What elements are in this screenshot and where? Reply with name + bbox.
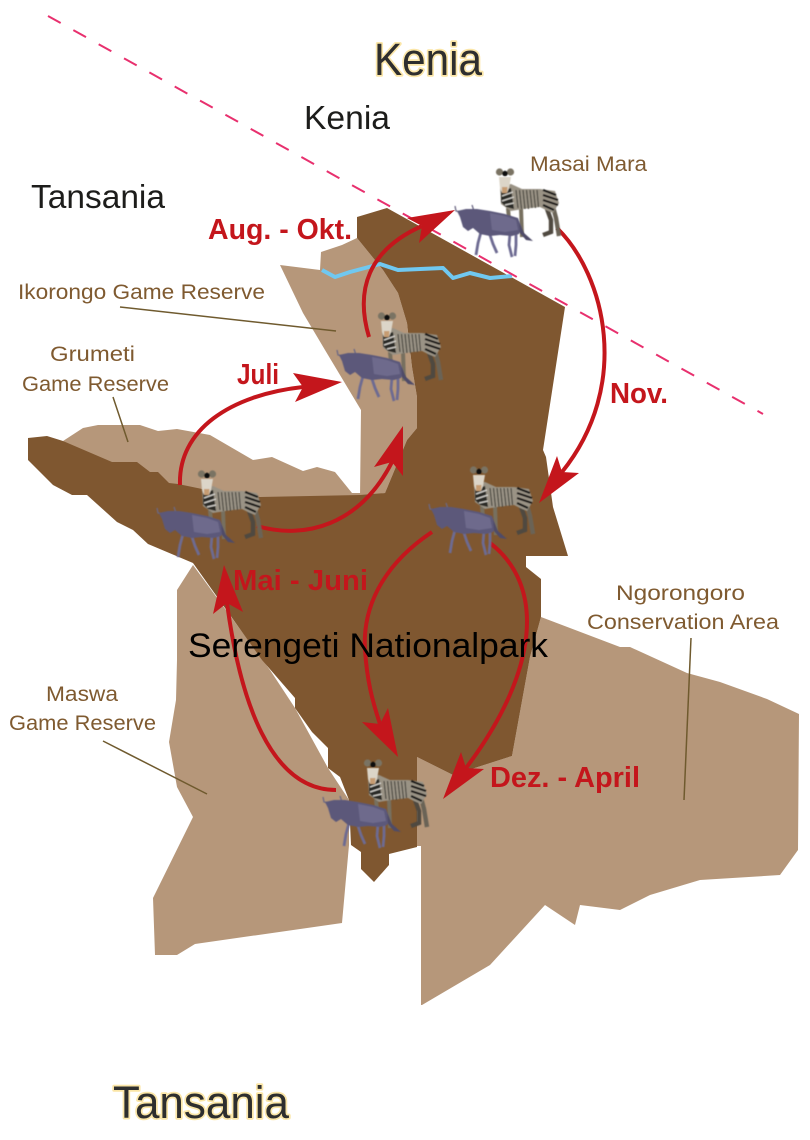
region: Grumeti Game Reserve [63,425,362,500]
animals: Ikorongo [337,312,441,401]
animals: Masai Mara [455,168,559,257]
month: Juli: Juli [237,359,279,391]
label: Grumeti Game Reserve [22,343,169,442]
animals: south [323,759,427,848]
animals: Grumeti [157,470,261,559]
arrow: Masai Mara to November [539,228,605,503]
arrow: to Mai and Juni [213,565,336,790]
arrow: Mai to Juni [257,426,403,531]
arrow: to Masai Mara [364,210,455,337]
title: Tansania outlined: Tansania [113,1077,290,1128]
animals: central east [429,466,533,555]
label: Grumeti Game Reserve: Grumeti [50,343,135,366]
region: Ikorongo Game Reserve [280,238,417,497]
region: Ngorongoro Conservation Area [417,617,799,1005]
month: Mai - Juni: Mai - Juni [233,565,368,597]
label: Serengeti Nationalpark: Serengeti Nationalpark [188,627,549,665]
label: Kenia: Kenia [304,99,391,136]
region: Maswa Game Reserve [153,565,349,955]
label: Ikorongo Game Reserve: Ikorongo Game Reserve [18,281,265,304]
label: Maswa Game Reserve: Maswa [46,683,118,706]
label: Ikorongo Game Reserve [18,281,336,331]
label: Ngorongoro Conservation Area [587,582,779,800]
month: Dez. - April: Dez. - April [490,762,640,794]
month: Aug. - Okt.: Aug. - Okt. [208,214,352,246]
month: Nov.: Nov. [610,378,668,410]
label: Masai Mara: Masai Mara [530,153,647,176]
title: Kenia outlined: Kenia [374,34,483,85]
label: Tansania: Tansania [31,178,166,215]
river [322,264,512,278]
label: Maswa Game Reserve: Game Reserve [9,712,156,735]
label: Maswa Game Reserve [9,683,207,794]
arrow: south-east to Dezember [443,543,527,799]
label: Ngorongoro Conservation Area: Ngorongoro [616,582,745,605]
region: Serengeti Nationalpark [28,208,568,882]
arrow: south-west to Dezember [362,532,432,757]
label: Grumeti Game Reserve: Game Reserve [22,373,169,396]
border line: dashed pink [48,16,763,414]
arrow: Juli [180,373,342,485]
label: Ngorongoro Conservation Area: Conservation Area [587,611,779,634]
